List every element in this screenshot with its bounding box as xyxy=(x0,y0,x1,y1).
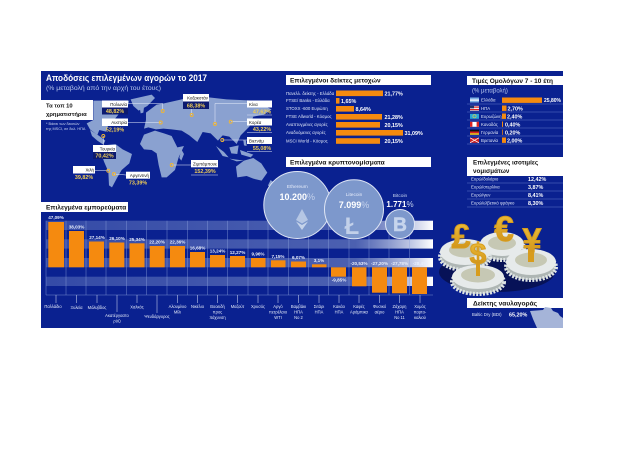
panel: selected stock indices xyxy=(286,75,431,145)
bond rows xyxy=(481,98,562,144)
label: Poland xyxy=(102,100,128,115)
commodity names: Νο 2 xyxy=(294,315,304,320)
label: Poland: Πολωνία xyxy=(110,102,127,107)
bond rows: Καναδάς xyxy=(481,122,498,127)
commodity names: Νο 11 xyxy=(394,315,406,320)
commodity names: Ψευδάργυρος xyxy=(144,314,170,319)
label: China: 47,62% xyxy=(253,109,271,115)
commodity names: Ακατέργαστο xyxy=(105,313,130,318)
commodity names: ρύζι xyxy=(113,318,121,324)
bar values: 26,10% xyxy=(109,236,125,241)
bar values: 12,27% xyxy=(230,250,245,255)
subheading: (% μεταβολή) xyxy=(472,88,508,94)
index rows: STOXX -600 Ευρώπη xyxy=(286,106,328,111)
commodity names: Καφές xyxy=(353,304,365,309)
bar values: 3,1% xyxy=(314,258,324,263)
gear: yen: ¥ xyxy=(523,222,542,260)
circle: Bitcoin xyxy=(386,193,414,238)
bar values: 22,36% xyxy=(170,240,185,244)
commodity names: Αργό xyxy=(273,304,283,309)
index rows: 20,15% xyxy=(384,123,403,129)
index rows: 21,77% xyxy=(384,92,403,98)
index rows: 1,65% xyxy=(341,99,356,105)
separators xyxy=(467,104,563,144)
currency rows: 8,41% xyxy=(528,193,543,199)
heading: Επιλεγμένοι δείκτες μετοχών xyxy=(290,76,381,84)
commodity names: Μαζούτ xyxy=(231,304,245,309)
label: Austria: 52,19% xyxy=(106,128,124,134)
heading: Επιλεγμένες ισοτιμίες xyxy=(473,158,539,166)
commodity names: ΗΠΑ xyxy=(315,310,324,314)
gear: pound: £ xyxy=(452,218,471,256)
bar values: 27,14% xyxy=(89,235,105,240)
label: Argentina xyxy=(126,172,150,186)
label: Vietnam xyxy=(247,137,272,152)
label: Kazakhstan: 68,38% xyxy=(187,103,205,109)
commodity names: Μόλυβδος xyxy=(88,305,106,310)
label: Zimbabwe: 152,39% xyxy=(194,169,216,175)
heading xyxy=(286,157,431,167)
baltic dry row: Baltic Dry (BDI) xyxy=(472,312,502,317)
bar values: -27,78% xyxy=(391,261,408,266)
label: Turkey: Τουρκία xyxy=(100,146,115,151)
panel: bonds xyxy=(467,76,563,144)
bar values: 9,96% xyxy=(251,252,265,256)
leader lines xyxy=(95,104,247,175)
index rows: 20,15% xyxy=(384,139,403,145)
label: Turkey xyxy=(93,145,116,160)
circle: Ethereum xyxy=(264,172,331,238)
shadow xyxy=(439,252,555,292)
commodity names: Σιτάρι xyxy=(314,304,324,309)
flags xyxy=(470,98,479,143)
heading xyxy=(467,157,563,176)
panel: currencies xyxy=(467,157,563,207)
bar values: -9,85% xyxy=(332,278,346,282)
bond rows: Ευρωζώνη xyxy=(481,114,502,119)
gear: euro: € xyxy=(494,210,514,249)
bar values: 6,07% xyxy=(292,255,305,260)
currency rows: 12,42% xyxy=(528,177,546,183)
bar values: 13,24% xyxy=(210,248,225,254)
label: Chile: 39,82% xyxy=(75,175,93,181)
commodity names: Φυσικό xyxy=(373,304,387,309)
land masses xyxy=(87,95,274,187)
commodity names: Χρυσός xyxy=(251,304,265,309)
label: China xyxy=(247,100,272,115)
top 10 box: Τα τοπ 10 xyxy=(46,104,73,110)
currency rows: Ευρώ/δολάριο xyxy=(471,176,499,182)
bond rows: Βρετανία xyxy=(481,138,498,143)
commodity names: Κακάο xyxy=(333,304,346,309)
commodity names: Παλλάδιο xyxy=(44,304,62,309)
currency rows: Ευρώ/ελβετικό φράγκο xyxy=(471,200,515,206)
commodity names: καλιού xyxy=(414,315,427,320)
index rows: 31,09% xyxy=(404,131,423,137)
commodity names: Αλουμίνιο xyxy=(169,304,187,309)
commodity names: Χαλκός xyxy=(130,304,144,310)
chart grid xyxy=(46,221,433,295)
index rows: FTSE/ Banks - Ελλάδα xyxy=(286,98,330,103)
bond rows: 2,40% xyxy=(507,114,522,120)
panel: world map of top 10 stock markets xyxy=(41,73,274,187)
label: Austria xyxy=(102,118,128,134)
label: China: Κίνα xyxy=(249,102,258,107)
label: Chile: Χιλή xyxy=(85,168,95,172)
commodity names: Αράμπικα xyxy=(350,310,369,314)
commodity names: Μίλι xyxy=(174,310,181,314)
gear: dollar: $ xyxy=(470,238,487,271)
commodity names: πορτο- xyxy=(414,310,427,314)
bar values xyxy=(48,215,427,282)
circle: Litecoin: Litecoin xyxy=(346,192,363,198)
bond rows: Ελλάδα xyxy=(481,98,496,102)
illustration: currency gears xyxy=(439,210,556,294)
market dots xyxy=(102,110,232,176)
bar values: 16,68% xyxy=(190,246,205,250)
icon: ship xyxy=(530,307,563,328)
baltic dry value: 65,20% xyxy=(509,312,527,318)
circle: Ethereum: Ethereum xyxy=(287,184,308,190)
bond rows: 2,00% xyxy=(507,138,522,144)
label: Zimbabwe: Ζιμπάμπουε xyxy=(193,162,217,166)
bars xyxy=(48,222,427,294)
label: Vietnam: 55,08% xyxy=(253,146,271,152)
panel: world map of top 10 stock markets: της MSCI, σε δολ. ΗΠΑ xyxy=(46,127,86,131)
circle: Litecoin xyxy=(324,180,384,240)
bond rows: 2,70% xyxy=(508,106,523,112)
bar values: -20,53% xyxy=(350,261,368,266)
bond rows: 25,80% xyxy=(544,98,562,104)
heading: νομισμάτων xyxy=(473,168,510,175)
panel: cryptocurrencies xyxy=(264,157,431,240)
panel: freight index xyxy=(467,298,563,328)
commodity names: Χυμός xyxy=(414,304,426,309)
heading: Δείκτης ναυλαγοράς xyxy=(473,299,538,307)
circle: Bitcoin: Bitcoin xyxy=(393,193,408,199)
commodity names: Βοοειδή xyxy=(210,304,226,309)
index rows: MSCI World - Κόσμος xyxy=(286,138,328,143)
bond rows: 0,20% xyxy=(505,130,520,136)
commodity names: αέριο xyxy=(375,310,385,314)
bond rows: Γερμανία xyxy=(481,130,499,135)
top 10 box: χρηματιστήρια xyxy=(46,112,87,118)
label: Argentina: 73,39% xyxy=(129,180,147,186)
circle: Bitcoin: B xyxy=(393,215,407,236)
bar values: 47,09% xyxy=(48,215,64,220)
footnote: * Βάσει των δεικτών xyxy=(46,122,80,126)
currency rows xyxy=(467,176,563,207)
label: Argentina: Αργεντινή xyxy=(130,173,150,178)
circle: Litecoin: 7.099% xyxy=(339,200,369,210)
commodity names xyxy=(44,304,427,324)
commodity names: WTI xyxy=(274,315,282,320)
index rows: Πανελλ. δείκτης - Ελλάδα xyxy=(286,91,335,96)
label: Turkey: 70,42% xyxy=(95,154,114,160)
bond rows: ΗΠΑ xyxy=(481,106,490,111)
bar values: 22,20% xyxy=(149,240,165,244)
heading xyxy=(41,202,128,212)
bar values: -28,4% xyxy=(413,261,427,266)
label: Zimbabwe xyxy=(191,160,218,175)
bond rows: 0,40% xyxy=(505,122,520,128)
heading: Επιλεγμένα εμπορεύματα xyxy=(46,203,126,211)
circle: Bitcoin: 1.771% xyxy=(386,200,414,209)
bar values: 25,34% xyxy=(129,237,145,242)
map subtitle: (% μεταβολή από την αρχή του έτους) xyxy=(46,85,161,92)
currency rows: 8,30% xyxy=(528,201,543,207)
label: Korea xyxy=(247,118,272,133)
top 10 box xyxy=(41,100,93,120)
index rows xyxy=(286,90,423,145)
commodity names: ΗΠΑ xyxy=(335,310,344,314)
bar values: 38,03% xyxy=(69,224,84,230)
commodity names: Ζάχαρη xyxy=(393,304,407,309)
commodity names: πετρέλαιο xyxy=(269,310,288,314)
label: Kazakhstan xyxy=(183,94,209,109)
label: Poland: 48,82% xyxy=(106,109,124,115)
circle: Ethereum: 10.200% xyxy=(280,192,315,202)
panel: background xyxy=(41,71,563,328)
index rows: Αναδυόμενες αγορές xyxy=(286,130,326,135)
bar values: -27,20% xyxy=(371,261,388,266)
label: Austria: Αυστρία xyxy=(111,120,127,125)
currency rows: 3,87% xyxy=(528,185,543,191)
heading: Επιλεγμένα κρυπτονομίσματα xyxy=(290,158,385,166)
index rows: 21,28% xyxy=(384,115,403,121)
heading xyxy=(286,75,431,85)
label: Kazakhstan: Καζακστάν xyxy=(187,96,209,100)
commodity names: Νικέλιο xyxy=(191,304,205,309)
commodity names: προς xyxy=(213,310,222,314)
commodity names: Βαμβάκι xyxy=(291,304,306,309)
label: Korea: Κορέα xyxy=(249,120,262,125)
bar values: 7,15% xyxy=(271,254,285,259)
circle: Litecoin: Ł xyxy=(345,213,359,240)
panel: commodities chart xyxy=(41,202,433,324)
heading: Τιμές Ομολόγων 7 - 10 έτη xyxy=(472,77,553,85)
commodity names: Ξυλεία xyxy=(70,305,83,310)
map title: Αποδόσεις επιλεγμένων αγορών το 2017 xyxy=(46,73,207,83)
axis ticks xyxy=(56,295,420,313)
index rows: 8,64% xyxy=(356,107,371,113)
label: Korea: 43,22% xyxy=(253,127,271,133)
commodity names: ΗΠΑ xyxy=(294,310,303,314)
index rows: Αναπτυγμένες αγορές xyxy=(286,122,328,127)
commodity names: πάχυνση xyxy=(209,315,226,320)
index rows: FTSE Allworld - Κόσμος xyxy=(286,114,332,119)
chart bands xyxy=(46,221,433,286)
currency rows: Ευρώ/στερλίνα xyxy=(471,184,500,190)
commodity names: ΗΠΑ xyxy=(395,310,404,314)
label: Chile xyxy=(73,166,95,181)
currency rows: Ευρώ/γιεν xyxy=(471,192,490,198)
label: Vietnam: Βιετνάμ xyxy=(249,138,264,143)
